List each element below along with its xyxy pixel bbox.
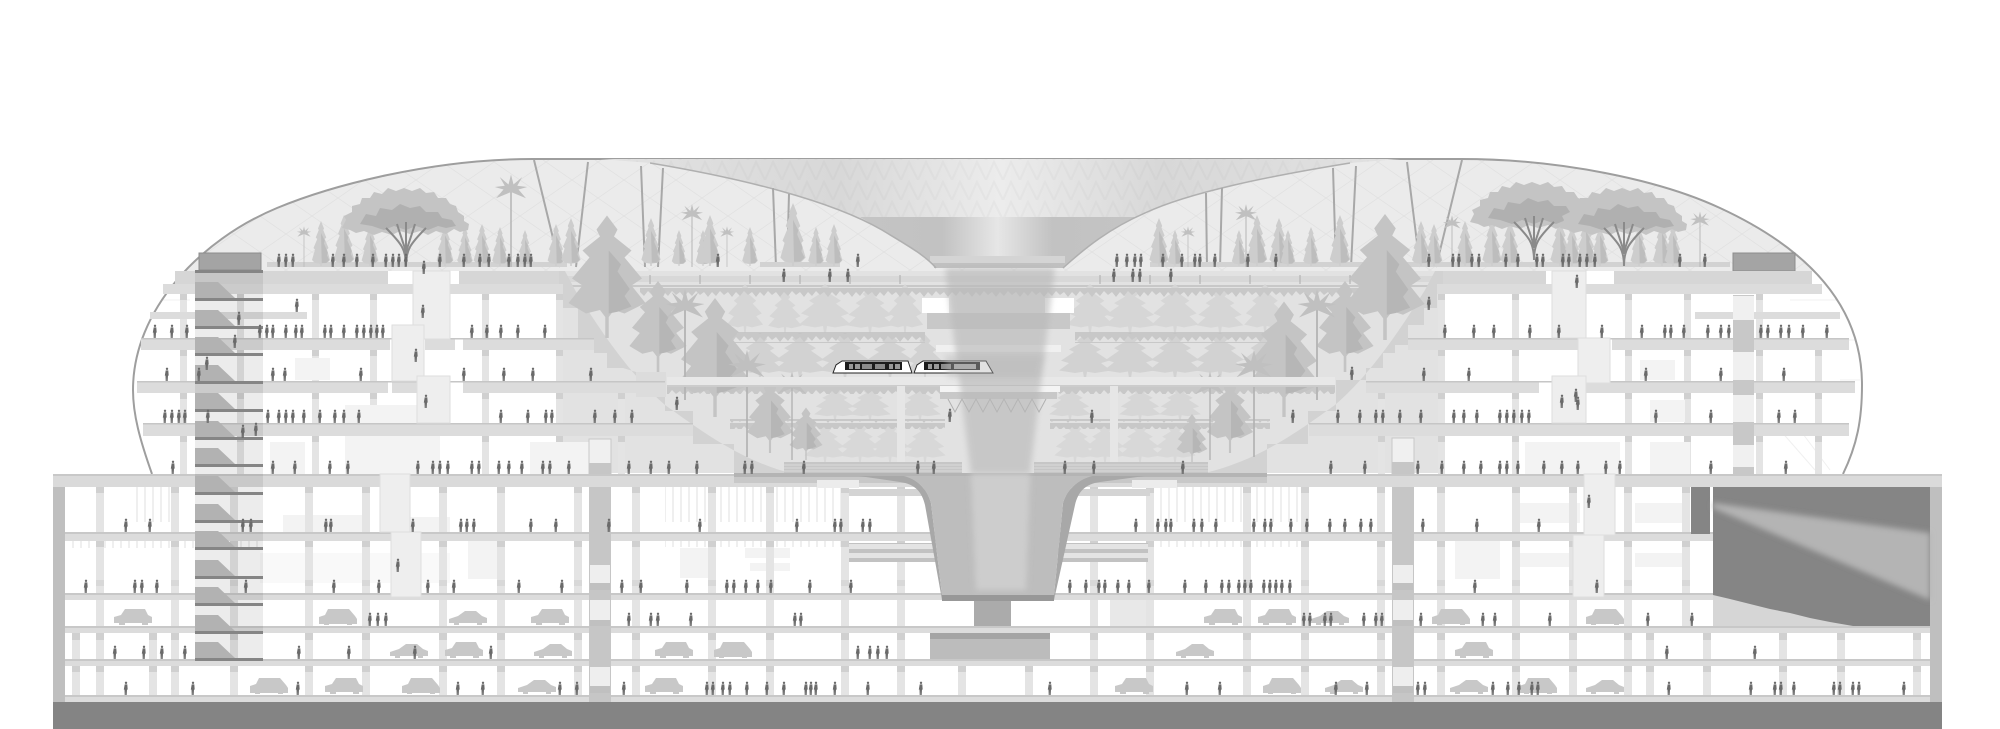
stepped planter right xyxy=(1205,271,1443,473)
lower elevator cores xyxy=(589,487,1414,702)
cars: level three xyxy=(250,678,1624,694)
rooftop box left xyxy=(199,253,261,270)
people: basement three xyxy=(368,613,1694,626)
bedrock ground band xyxy=(53,702,1942,729)
lower columns xyxy=(60,487,1940,702)
upper faint facades xyxy=(270,358,1690,474)
central funnel skylight xyxy=(600,159,1400,268)
central stair bands xyxy=(849,489,1150,562)
cars: level two xyxy=(390,642,1493,658)
people: fourth level xyxy=(163,410,1797,423)
people: basement two xyxy=(84,580,1599,593)
stepped planter left xyxy=(559,271,790,473)
core floors behind waterfall xyxy=(922,298,1074,412)
people: third level xyxy=(165,368,1786,381)
rooftop box right xyxy=(1733,253,1795,271)
people: basement one xyxy=(124,519,1541,532)
people: main concourse xyxy=(171,461,1788,474)
lower level faint partitions xyxy=(70,487,1690,626)
outer walls xyxy=(53,487,1942,702)
lower floor slabs xyxy=(53,474,1942,702)
roof struts xyxy=(534,160,1462,267)
section drawing: domed mixed-use building xyxy=(53,158,1942,729)
lower escalators xyxy=(380,474,1615,597)
atrium trees xyxy=(568,214,1425,463)
people: roof garden xyxy=(277,254,1707,267)
people: skywalk and escalators xyxy=(197,261,1591,572)
cars: level one xyxy=(114,609,1624,625)
stair tower left xyxy=(195,270,263,661)
train viaduct xyxy=(667,377,1335,471)
people: basement five xyxy=(124,682,1906,695)
upper floor slabs xyxy=(137,271,1855,436)
glass dome roof xyxy=(120,155,1880,474)
atrium floor plinth xyxy=(734,473,1267,488)
upper escalators xyxy=(392,271,1610,423)
train xyxy=(833,355,1045,378)
canopy tree left xyxy=(342,188,469,266)
atrium stepped floor xyxy=(784,462,1208,473)
canopy tree right two xyxy=(1560,188,1687,266)
waterfall column xyxy=(945,268,1055,474)
roof garden planting xyxy=(267,174,1730,267)
people: second level xyxy=(153,325,1829,338)
upper columns xyxy=(130,294,1870,474)
lower funnel basin xyxy=(859,474,1145,659)
atrium forest backdrop xyxy=(560,284,1440,473)
people: basement four xyxy=(113,646,1757,659)
canopy tree right one xyxy=(1470,182,1597,260)
cinema hall xyxy=(1691,487,1930,626)
upper elevators xyxy=(589,295,1754,474)
skywalk bridge xyxy=(560,271,1440,287)
